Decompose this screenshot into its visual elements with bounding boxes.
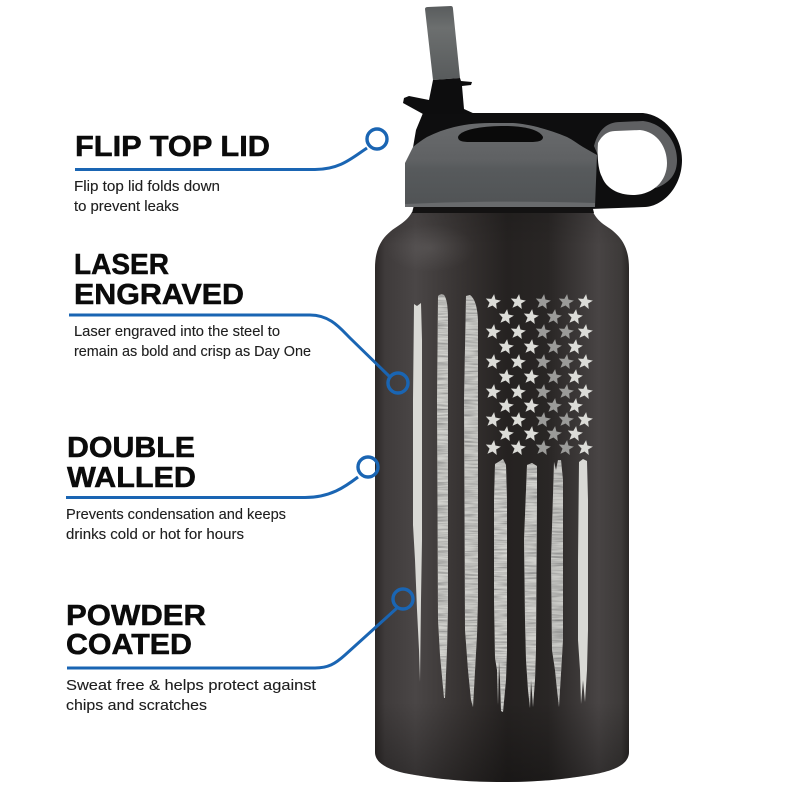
description: to prevent leaks [74, 199, 179, 215]
heading [74, 249, 244, 311]
description [74, 179, 220, 215]
description: Prevents condensation and keeps [66, 507, 286, 523]
leader line [69, 315, 390, 377]
heading: POWDER [66, 600, 206, 632]
black carry loop and lid back [410, 113, 682, 209]
grey lid cap [405, 123, 597, 207]
engraved flag stars [485, 293, 594, 455]
body shading [375, 212, 629, 782]
description: chips and scratches [66, 698, 207, 714]
heading: WALLED [67, 462, 196, 494]
white loop opening [598, 130, 667, 195]
leader line [66, 477, 358, 498]
leader line [75, 148, 367, 170]
shoulder highlight [385, 224, 475, 272]
marker [367, 129, 387, 149]
heading: FLIP TOP LID [75, 131, 270, 163]
heading: DOUBLE [67, 432, 195, 464]
description: Flip top lid folds down [74, 179, 220, 195]
marker [393, 589, 413, 609]
heading [66, 600, 206, 661]
description: drinks cold or hot for hours [66, 527, 244, 543]
engraved flag stripes [413, 294, 588, 712]
callout: double walled [66, 432, 378, 543]
lid slot [458, 126, 543, 142]
neck gasket [412, 205, 594, 213]
leader line [67, 608, 397, 668]
description: remain as bold and crisp as Day One [74, 344, 311, 360]
spout black hinge [403, 78, 475, 114]
description: Sweat free & helps protect against [66, 678, 316, 694]
callout: powder coated [66, 589, 413, 714]
flip top lid [403, 6, 682, 213]
grey inner loop ring [594, 121, 677, 188]
heading: COATED [66, 629, 192, 661]
bottle [375, 212, 629, 782]
callout: flip top lid [74, 129, 387, 215]
bottle body [375, 212, 629, 782]
description: Laser engraved into the steel to [74, 324, 280, 340]
heading: LASER [74, 249, 169, 281]
description [74, 324, 311, 360]
description [66, 507, 286, 543]
description [66, 678, 316, 714]
lid seam [405, 202, 595, 207]
heading: ENGRAVED [74, 279, 244, 311]
callout: laser engraved [69, 249, 408, 393]
heading [67, 432, 196, 494]
spout grey tip [425, 6, 460, 80]
marker [358, 457, 378, 477]
marker [388, 373, 408, 393]
